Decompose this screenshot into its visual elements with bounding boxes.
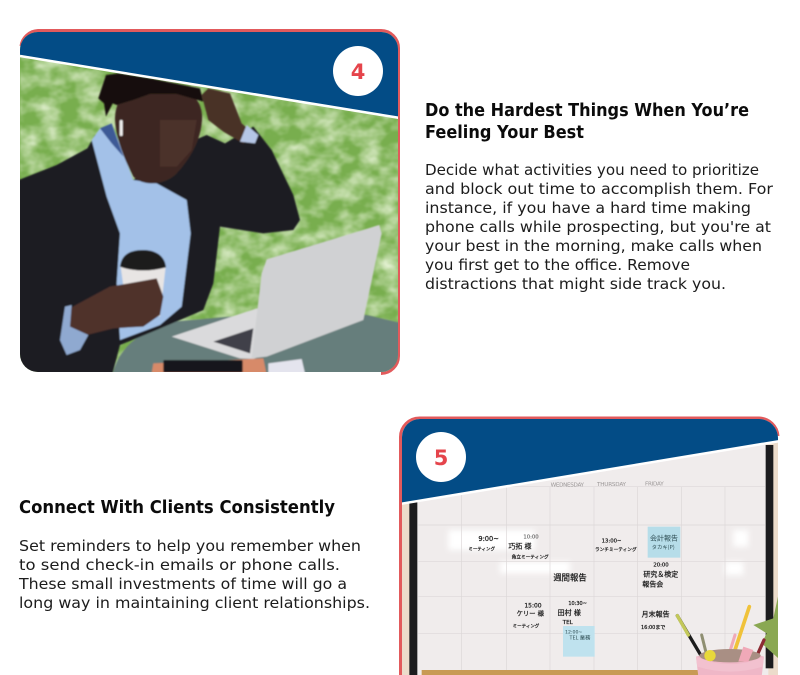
cuff — [240, 125, 258, 143]
body copy: your best in the morning, make calls when — [425, 237, 762, 255]
board — [413, 445, 768, 675]
jacket — [10, 127, 300, 383]
body copy: distractions that might side track you. — [425, 275, 726, 293]
header band — [400, 417, 780, 504]
handwritten schedule notes: 10:30~ — [568, 601, 587, 607]
heading: Feeling Your Best — [425, 123, 584, 143]
number badge 4 — [333, 46, 383, 96]
heading: Do the Hardest Things When You’re — [425, 101, 749, 121]
board side frames — [409, 445, 773, 675]
table — [112, 314, 398, 372]
corkboard ledge — [422, 670, 702, 675]
neck and head — [115, 84, 202, 183]
handwritten schedule notes: ミーティング — [513, 622, 540, 629]
sticky note: top: 会計報告 — [650, 534, 678, 544]
number badge 5 — [416, 432, 466, 482]
header band — [20, 30, 400, 118]
card 5 red border — [400, 418, 778, 675]
plant — [753, 595, 778, 658]
weekday labels: WEDNESDAY — [551, 483, 585, 489]
handwritten schedule notes: 15:00 — [524, 602, 542, 609]
handwritten schedule notes: 巧拓 様 — [508, 541, 532, 550]
hair — [98, 73, 203, 117]
body copy: instance, if you have a hard time making — [425, 199, 751, 217]
hand on head — [202, 88, 253, 143]
body copy: to send check-in emails or phone calls. — [19, 556, 340, 574]
weekday labels — [550, 482, 664, 486]
panel: photo card 4 — [10, 30, 410, 383]
laptop base — [172, 308, 258, 360]
phone wallet — [150, 358, 267, 372]
sticky note: bottom: TEL 業務 — [569, 634, 591, 642]
body copy: phone calls while prospecting, but you're at — [425, 218, 771, 236]
handwritten schedule notes: 10:00 — [523, 534, 539, 540]
handwritten schedule notes: 20:00 — [653, 563, 669, 569]
header diagonal rule — [400, 441, 780, 504]
hand on cup — [67, 278, 163, 337]
photo: whiteboard calendar — [400, 417, 780, 675]
body copy: These small investments of time will go a — [18, 575, 347, 593]
number badge 5: 5 — [434, 446, 448, 470]
body copy: you first get to the office. Remove — [425, 256, 690, 274]
sticky note: bottom: 12:00~ — [565, 629, 582, 635]
text block: hardest things — [425, 101, 774, 293]
shirt cuff — [60, 305, 88, 355]
handwritten schedule notes: 報告会 — [642, 579, 663, 588]
laptop lid — [252, 225, 382, 358]
sticky note: top — [648, 527, 680, 558]
body copy: and block out time to accomplish them. For — [425, 180, 774, 198]
body copy: Set reminders to help you remember when — [19, 537, 361, 555]
handwritten schedule notes: 研究＆検定 — [643, 570, 678, 579]
pencil cup — [696, 647, 764, 675]
body copy: long way in maintaining client relationships. — [19, 594, 370, 612]
weekday labels: THURSDAY — [596, 482, 627, 488]
glare — [448, 530, 748, 575]
handwritten schedule notes: TEL — [562, 620, 574, 626]
handwritten schedule notes: 角立ミーティング — [512, 553, 549, 560]
handwritten schedule notes: 月末報告 — [642, 609, 670, 618]
handwritten schedule notes: 週間報告 — [553, 573, 587, 583]
handwritten schedule notes: 16:00まで — [641, 625, 665, 631]
face highlight — [160, 120, 197, 167]
sticky note: top: タカキ(P) — [652, 543, 675, 551]
calendar grid — [418, 487, 765, 670]
card 4 red border — [21, 30, 398, 374]
handwritten schedule notes: ケリー 様 — [517, 609, 545, 618]
earbud — [120, 120, 123, 136]
body copy — [425, 161, 774, 293]
handwritten schedule notes: 13:00~ — [602, 538, 621, 544]
body copy — [18, 537, 370, 612]
heading: Connect With Clients Consistently — [19, 498, 335, 518]
text block: connect with clients — [18, 498, 370, 612]
weekday labels: FRIDAY — [645, 482, 664, 488]
photo: man with laptop in front of foliage — [10, 30, 410, 383]
paper — [267, 358, 306, 372]
panel: photo card 5 — [400, 417, 780, 675]
heading — [425, 101, 749, 143]
shirt inner collar — [100, 123, 123, 157]
sticky note: bottom — [563, 626, 595, 657]
body copy: Decide what activities you need to prioritize — [425, 161, 759, 179]
header diagonal rule — [20, 56, 400, 118]
shirt — [92, 123, 191, 340]
coffee cup — [121, 267, 166, 317]
handwritten schedule notes — [468, 534, 678, 631]
number badge 4: 4 — [351, 60, 365, 84]
handwritten schedule notes: 9:00~ — [478, 535, 499, 543]
pencils — [677, 607, 764, 662]
handwritten schedule notes: 田村 様 — [558, 608, 581, 617]
handwritten schedule notes: ミーティング — [468, 546, 495, 553]
handwritten schedule notes: ランチミーティング — [595, 546, 637, 553]
